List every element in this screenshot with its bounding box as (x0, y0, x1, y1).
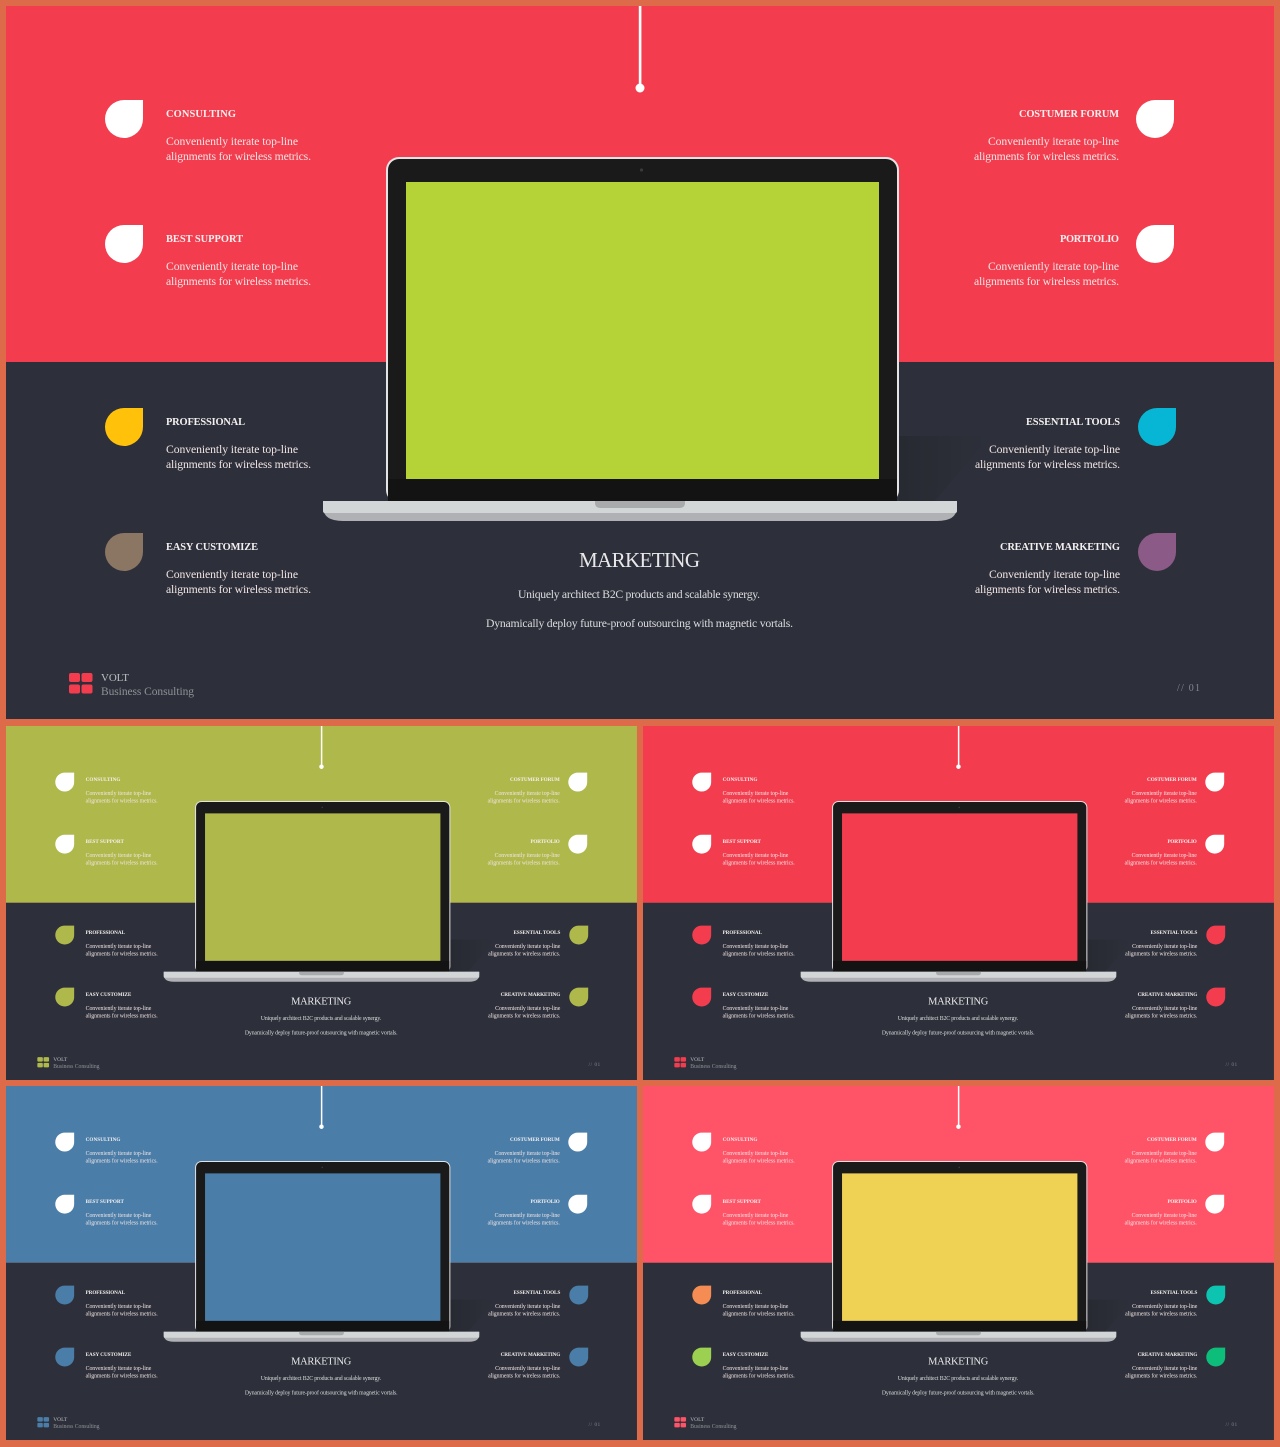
feature: consulting: alignments for wireless metrics. (86, 1157, 158, 1164)
logo: Business Consulting (53, 1424, 100, 1430)
feature: consulting: CONSULTING (166, 109, 236, 120)
feature: easy customize: alignments for wireless metrics. (86, 1012, 158, 1019)
panel: top band (643, 1086, 1274, 1263)
feature: professional: alignments for wireless metrics. (166, 458, 311, 471)
feature: consulting (55, 773, 158, 804)
hanging line (319, 1086, 324, 1129)
feature: costumer forum (488, 1133, 587, 1164)
logo (37, 1417, 100, 1430)
feature: consulting (105, 100, 311, 163)
heading and description (245, 1357, 398, 1396)
page number: // 01 (589, 1063, 601, 1068)
feature: portfolio: alignments for wireless metrics. (1125, 860, 1197, 867)
panel: top band (6, 6, 1274, 362)
slide 2: olive variant (6, 726, 637, 1080)
feature: creative marketing: CREATIVE MARKETING (501, 992, 560, 998)
heading and description: Uniquely architect B2C products and scalable synergy. (518, 588, 760, 601)
feature: easy customize: alignments for wireless metrics. (166, 583, 311, 596)
panel: bottom band (643, 1263, 1274, 1440)
feature: creative marketing: Conveniently iterate top-line (495, 1006, 561, 1012)
feature: costumer forum (488, 773, 587, 804)
panel: top band (6, 726, 637, 903)
heading and description: Uniquely architect B2C products and scalable synergy. (898, 1016, 1019, 1022)
feature: easy customize (692, 988, 795, 1019)
feature: creative marketing: alignments for wireless metrics. (975, 583, 1120, 596)
heading and description: MARKETING (291, 997, 352, 1008)
feature: best support: Conveniently iterate top-line (166, 260, 298, 273)
feature: professional: PROFESSIONAL (166, 417, 245, 428)
feature: portfolio: PORTFOLIO (1167, 839, 1197, 845)
feature: essential tools: alignments for wireless metrics. (488, 950, 561, 957)
feature: consulting: alignments for wireless metrics. (166, 150, 311, 163)
panel: top band (6, 1086, 637, 1263)
feature: costumer forum: alignments for wireless metrics. (1125, 1157, 1197, 1164)
feature: easy customize: Conveniently iterate top-line (723, 1006, 789, 1012)
feature: portfolio: PORTFOLIO (530, 1199, 560, 1205)
feature: portfolio: PORTFOLIO (1167, 1199, 1197, 1205)
feature: essential tools (488, 1286, 588, 1317)
feature: best support (55, 835, 158, 867)
feature: costumer forum: Conveniently iterate top-line (1132, 791, 1197, 797)
feature: professional: Conveniently iterate top-line (86, 944, 152, 950)
feature: consulting: Conveniently iterate top-line (86, 791, 152, 797)
feature: essential tools: ESSENTIAL TOOLS (1151, 930, 1197, 936)
feature: costumer forum (974, 100, 1174, 163)
panel: bottom band (6, 1263, 637, 1440)
feature: best support: Conveniently iterate top-line (86, 853, 152, 859)
feature: portfolio (488, 835, 587, 867)
feature: creative marketing (488, 988, 588, 1019)
logo: VOLT (690, 1057, 705, 1063)
feature: easy customize: alignments for wireless metrics. (723, 1012, 795, 1019)
feature: portfolio: PORTFOLIO (1060, 234, 1119, 245)
shadow behind laptop (450, 939, 496, 972)
feature: best support: alignments for wireless metrics. (166, 275, 311, 288)
feature: creative marketing: Conveniently iterate top-line (989, 568, 1120, 581)
feature: easy customize (55, 988, 158, 1019)
feature: portfolio: alignments for wireless metrics. (1125, 1220, 1197, 1227)
heading and description (882, 997, 1035, 1036)
feature: portfolio: Conveniently iterate top-line (495, 1213, 560, 1219)
feature: portfolio (1125, 1195, 1224, 1227)
feature: creative marketing (1125, 988, 1225, 1019)
panel: bottom band (6, 903, 637, 1080)
logo: VOLT (101, 672, 129, 684)
feature: creative marketing: alignments for wireless metrics. (488, 1372, 561, 1379)
logo (674, 1057, 737, 1070)
heading and description: MARKETING (928, 1357, 989, 1368)
feature: essential tools (488, 926, 588, 957)
heading and description: MARKETING (928, 997, 989, 1008)
feature: costumer forum: COSTUMER FORUM (1147, 777, 1197, 783)
feature: creative marketing (488, 1348, 588, 1379)
feature: professional: Conveniently iterate top-line (723, 1304, 789, 1310)
feature: best support (55, 1195, 158, 1227)
logo: Business Consulting (53, 1064, 100, 1070)
page number: // 01 (1226, 1423, 1238, 1428)
feature: consulting: CONSULTING (723, 777, 757, 783)
feature: portfolio: Conveniently iterate top-line (495, 853, 560, 859)
feature: costumer forum: alignments for wireless metrics. (488, 1157, 560, 1164)
feature: easy customize: alignments for wireless metrics. (86, 1372, 158, 1379)
feature: creative marketing: Conveniently iterate top-line (1132, 1366, 1198, 1372)
feature: consulting: Conveniently iterate top-line (86, 1151, 152, 1157)
feature: professional (692, 1286, 795, 1317)
heading and description: Dynamically deploy future-proof outsourcing with magnetic vortals. (882, 1029, 1035, 1036)
feature: easy customize (55, 1348, 158, 1379)
feature: essential tools: Conveniently iterate top-line (495, 1304, 561, 1310)
feature: professional: PROFESSIONAL (723, 1290, 762, 1296)
feature: essential tools: Conveniently iterate top-line (495, 944, 561, 950)
feature: professional: PROFESSIONAL (723, 930, 762, 936)
feature: costumer forum: COSTUMER FORUM (1147, 1137, 1197, 1143)
feature: professional: alignments for wireless metrics. (86, 950, 158, 957)
feature: best support: BEST SUPPORT (723, 839, 761, 845)
slide 4: blue variant (6, 1086, 637, 1440)
feature: costumer forum: COSTUMER FORUM (1019, 109, 1119, 120)
feature: essential tools (1125, 926, 1225, 957)
feature: consulting: Conveniently iterate top-line (723, 791, 789, 797)
feature: professional: Conveniently iterate top-line (166, 443, 298, 456)
panel: bottom band (643, 903, 1274, 1080)
laptop (801, 1161, 1116, 1342)
logo (37, 1057, 100, 1070)
feature: consulting: Conveniently iterate top-line (723, 1151, 789, 1157)
laptop (164, 801, 479, 982)
feature: best support: alignments for wireless metrics. (86, 860, 158, 867)
feature: creative marketing: CREATIVE MARKETING (1138, 992, 1197, 998)
feature: best support: Conveniently iterate top-line (723, 853, 789, 859)
heading and description (486, 548, 793, 630)
feature: best support: Conveniently iterate top-line (86, 1213, 152, 1219)
feature: costumer forum: COSTUMER FORUM (510, 777, 560, 783)
feature: essential tools: ESSENTIAL TOOLS (514, 1290, 560, 1296)
feature: costumer forum: Conveniently iterate top-line (495, 791, 560, 797)
feature: easy customize: EASY CUSTOMIZE (166, 542, 258, 553)
heading and description: Uniquely architect B2C products and scalable synergy. (261, 1016, 382, 1022)
feature: costumer forum: Conveniently iterate top-line (988, 135, 1119, 148)
feature: best support: BEST SUPPORT (86, 839, 124, 845)
heading and description: Dynamically deploy future-proof outsourcing with magnetic vortals. (245, 1029, 398, 1036)
slide 5: pink and yellow variant (643, 1086, 1274, 1440)
feature: easy customize: EASY CUSTOMIZE (86, 1352, 132, 1358)
feature: consulting: CONSULTING (86, 1137, 120, 1143)
feature: easy customize: Conveniently iterate top-line (166, 568, 298, 581)
panel: bottom band (6, 362, 1274, 719)
feature: easy customize (105, 533, 311, 596)
feature: easy customize (692, 1348, 795, 1379)
hanging line (636, 6, 644, 92)
feature: easy customize: Conveniently iterate top-line (86, 1366, 152, 1372)
feature: easy customize: EASY CUSTOMIZE (723, 1352, 769, 1358)
feature: essential tools (1125, 1286, 1225, 1317)
logo: VOLT (53, 1057, 68, 1063)
feature: essential tools: Conveniently iterate top-line (1132, 1304, 1198, 1310)
feature: best support (105, 225, 311, 288)
feature: consulting: CONSULTING (723, 1137, 757, 1143)
hanging line (319, 726, 324, 769)
feature: best support: BEST SUPPORT (166, 234, 243, 245)
panel: top band (643, 726, 1274, 903)
laptop (164, 1161, 479, 1342)
feature: best support: alignments for wireless metrics. (723, 860, 795, 867)
feature: professional (105, 408, 311, 471)
heading and description: MARKETING (579, 548, 700, 572)
feature: best support: alignments for wireless metrics. (723, 1220, 795, 1227)
feature: professional: alignments for wireless metrics. (723, 1310, 795, 1317)
feature: professional: Conveniently iterate top-line (86, 1304, 152, 1310)
feature: portfolio (488, 1195, 587, 1227)
feature: consulting: alignments for wireless metrics. (723, 797, 795, 804)
logo: Business Consulting (690, 1064, 737, 1070)
feature: easy customize: EASY CUSTOMIZE (723, 992, 769, 998)
feature: essential tools: alignments for wireless metrics. (975, 458, 1120, 471)
logo: VOLT (690, 1417, 705, 1423)
shadow behind laptop (899, 436, 990, 501)
feature: best support (692, 835, 795, 867)
feature: creative marketing: Conveniently iterate top-line (1132, 1006, 1198, 1012)
feature: portfolio (1125, 835, 1224, 867)
feature: creative marketing: alignments for wireless metrics. (1125, 1372, 1198, 1379)
slide 3: red variant (643, 726, 1274, 1080)
logo: Business Consulting (690, 1424, 737, 1430)
feature: consulting (692, 1133, 795, 1164)
feature: easy customize: alignments for wireless metrics. (723, 1372, 795, 1379)
feature: creative marketing: CREATIVE MARKETING (1138, 1352, 1197, 1358)
feature: professional (692, 926, 795, 957)
shadow behind laptop (1087, 939, 1133, 972)
feature: costumer forum: Conveniently iterate top-line (1132, 1151, 1197, 1157)
feature: consulting (692, 773, 795, 804)
heading and description (882, 1357, 1035, 1396)
heading and description: Dynamically deploy future-proof outsourcing with magnetic vortals. (245, 1389, 398, 1396)
feature: creative marketing: CREATIVE MARKETING (501, 1352, 560, 1358)
page number: // 01 (1177, 683, 1200, 694)
feature: portfolio: Conveniently iterate top-line (1132, 1213, 1197, 1219)
feature: essential tools: alignments for wireless metrics. (1125, 950, 1198, 957)
heading and description: Dynamically deploy future-proof outsourcing with magnetic vortals. (486, 617, 793, 630)
feature: professional: PROFESSIONAL (86, 1290, 125, 1296)
laptop (323, 157, 957, 521)
feature: professional: alignments for wireless metrics. (86, 1310, 158, 1317)
feature: portfolio (974, 225, 1174, 288)
feature: essential tools: Conveniently iterate top-line (989, 443, 1120, 456)
feature: consulting (55, 1133, 158, 1164)
logo (674, 1417, 737, 1430)
feature: consulting: alignments for wireless metrics. (86, 797, 158, 804)
feature: consulting: alignments for wireless metrics. (723, 1157, 795, 1164)
feature: professional: Conveniently iterate top-line (723, 944, 789, 950)
heading and description: Uniquely architect B2C products and scalable synergy. (261, 1376, 382, 1382)
feature: costumer forum: alignments for wireless metrics. (488, 797, 560, 804)
feature: essential tools: ESSENTIAL TOOLS (1026, 417, 1120, 428)
heading and description (245, 997, 398, 1036)
feature: professional: PROFESSIONAL (86, 930, 125, 936)
feature: portfolio: alignments for wireless metrics. (488, 860, 560, 867)
page number: // 01 (1226, 1063, 1238, 1068)
feature: best support: BEST SUPPORT (723, 1199, 761, 1205)
feature: best support (692, 1195, 795, 1227)
feature: costumer forum: alignments for wireless metrics. (974, 150, 1119, 163)
feature: professional (55, 1286, 158, 1317)
feature: best support: BEST SUPPORT (86, 1199, 124, 1205)
hanging line (956, 726, 961, 769)
feature: professional: alignments for wireless metrics. (723, 950, 795, 957)
feature: costumer forum: alignments for wireless metrics. (1125, 797, 1197, 804)
feature: essential tools: alignments for wireless metrics. (488, 1310, 561, 1317)
feature: costumer forum: COSTUMER FORUM (510, 1137, 560, 1143)
heading and description: Dynamically deploy future-proof outsourcing with magnetic vortals. (882, 1389, 1035, 1396)
feature: consulting: CONSULTING (86, 777, 120, 783)
feature: easy customize: EASY CUSTOMIZE (86, 992, 132, 998)
feature: essential tools: ESSENTIAL TOOLS (1151, 1290, 1197, 1296)
feature: portfolio: alignments for wireless metrics. (974, 275, 1119, 288)
feature: creative marketing: CREATIVE MARKETING (1000, 542, 1120, 553)
feature: essential tools: ESSENTIAL TOOLS (514, 930, 560, 936)
feature: creative marketing: alignments for wireless metrics. (1125, 1012, 1198, 1019)
feature: best support: alignments for wireless metrics. (86, 1220, 158, 1227)
feature: portfolio: Conveniently iterate top-line (1132, 853, 1197, 859)
feature: easy customize: Conveniently iterate top-line (86, 1006, 152, 1012)
feature: best support: Conveniently iterate top-line (723, 1213, 789, 1219)
feature: essential tools (975, 408, 1176, 471)
feature: essential tools: alignments for wireless metrics. (1125, 1310, 1198, 1317)
feature: portfolio: alignments for wireless metrics. (488, 1220, 560, 1227)
logo (69, 672, 194, 698)
logo: VOLT (53, 1417, 68, 1423)
feature: easy customize: Conveniently iterate top-line (723, 1366, 789, 1372)
feature: portfolio: Conveniently iterate top-line (988, 260, 1119, 273)
feature: costumer forum (1125, 1133, 1224, 1164)
logo: Business Consulting (101, 686, 194, 698)
feature: creative marketing: Conveniently iterate top-line (495, 1366, 561, 1372)
feature: creative marketing: alignments for wireless metrics. (488, 1012, 561, 1019)
feature: costumer forum (1125, 773, 1224, 804)
hanging line (956, 1086, 961, 1129)
feature: portfolio: PORTFOLIO (530, 839, 560, 845)
feature: consulting: Conveniently iterate top-line (166, 135, 298, 148)
shadow behind laptop (1087, 1299, 1133, 1332)
shadow behind laptop (450, 1299, 496, 1332)
feature: professional (55, 926, 158, 957)
feature: creative marketing (975, 533, 1176, 596)
laptop (801, 801, 1116, 982)
heading and description: MARKETING (291, 1357, 352, 1368)
page number: // 01 (589, 1423, 601, 1428)
heading and description: Uniquely architect B2C products and scalable synergy. (898, 1376, 1019, 1382)
feature: costumer forum: Conveniently iterate top-line (495, 1151, 560, 1157)
slide 1: large marketing slide (6, 6, 1274, 719)
feature: creative marketing (1125, 1348, 1225, 1379)
feature: essential tools: Conveniently iterate top-line (1132, 944, 1198, 950)
